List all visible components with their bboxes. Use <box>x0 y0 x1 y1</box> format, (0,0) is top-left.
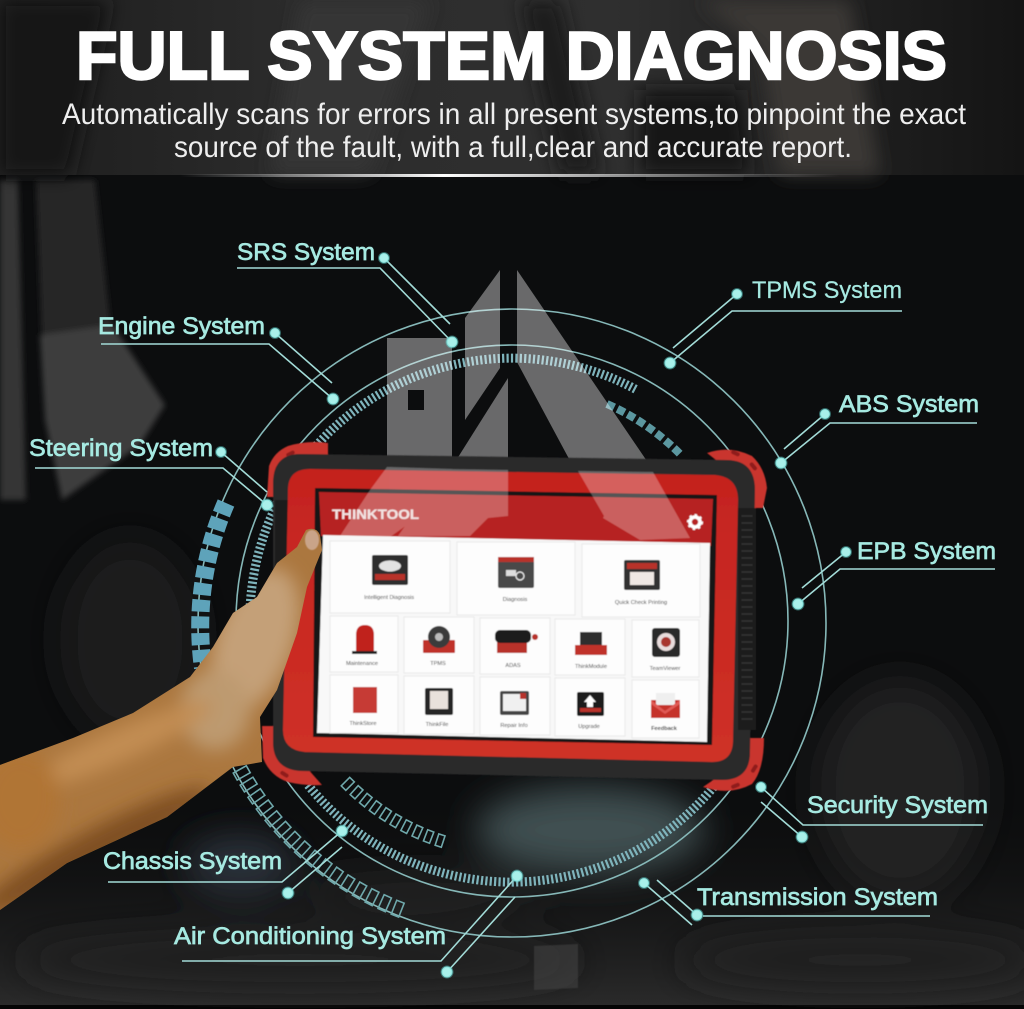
app: ThinkFile <box>425 688 453 728</box>
tick arc: top <box>250 358 637 610</box>
screen <box>317 535 710 742</box>
bumper: top right <box>707 449 767 508</box>
tablet <box>262 442 767 791</box>
app: Upgrade: Upgrade <box>578 724 600 730</box>
callout: Engine System <box>98 313 338 404</box>
callout: Security System: Security System <box>807 792 988 819</box>
callout: ABS System: ABS System <box>839 391 979 418</box>
callout: Steering System: Steering System <box>29 435 213 462</box>
callout: Transmission System <box>639 878 938 925</box>
title: FULL SYSTEM DIAGNOSIS <box>76 18 947 94</box>
header band <box>0 0 1024 177</box>
watermark on tablet <box>340 467 690 540</box>
callout: TPMS System <box>664 277 902 368</box>
app: Quick Check Printing <box>615 560 667 606</box>
HUD rings <box>198 309 826 937</box>
app: Repair Info <box>500 691 529 729</box>
thick dashes: top right <box>607 404 682 456</box>
app: ADAS <box>495 630 538 669</box>
callout: Security System <box>756 782 988 842</box>
app: Maintenance: Maintenance <box>346 661 378 667</box>
subtitle: Automatically scans for errors in all present systems,to pinpoint the exact <box>62 98 966 131</box>
header strip <box>319 492 713 546</box>
app cards <box>330 541 700 738</box>
callout: Air Conditioning System <box>174 870 522 978</box>
app: ThinkFile: ThinkFile <box>426 722 448 728</box>
subtitle <box>62 98 966 164</box>
bumper: top left <box>267 442 328 497</box>
app: TPMS <box>423 626 455 667</box>
callout: EPB System <box>792 538 996 610</box>
app: Feedback <box>651 693 680 732</box>
app: Quick Check Printing: Quick Check Printing <box>615 600 667 606</box>
app: TeamViewer: TeamViewer <box>650 666 680 672</box>
right grip <box>738 508 756 730</box>
watermark upper shapes <box>387 270 653 470</box>
callout: Chassis System: Chassis System <box>103 848 282 875</box>
bumper: bottom right <box>703 738 764 791</box>
callout: TPMS System: TPMS System <box>752 277 902 304</box>
left grip <box>275 500 289 610</box>
callout: Engine System: Engine System <box>98 313 265 340</box>
app: ADAS: ADAS <box>505 663 521 669</box>
hand holding tablet <box>0 520 330 929</box>
callout: ABS System <box>776 391 979 468</box>
app: Maintenance <box>346 625 378 667</box>
app: Diagnosis <box>498 557 534 603</box>
red frame <box>283 469 738 762</box>
app: ThinkStore: ThinkStore <box>349 721 377 727</box>
callout: Transmission System: Transmission System <box>697 884 938 911</box>
app: Upgrade <box>577 692 604 730</box>
app: Intelligent Diagnosis: Intelligent Diagnosis <box>364 595 414 601</box>
app: Diagnosis: Diagnosis <box>503 597 527 603</box>
callout: Steering System <box>29 435 272 510</box>
bumper: bottom left <box>262 726 322 785</box>
tablet body <box>273 454 755 780</box>
app: ThinkModule <box>575 632 607 670</box>
callout: Chassis System <box>103 826 348 898</box>
display bezel <box>313 488 717 745</box>
app: TPMS: TPMS <box>430 661 446 667</box>
icon: settings gear <box>688 515 702 529</box>
thick dashes: left <box>200 503 226 668</box>
subtitle: source of the fault, with a full,clear and accurate report. <box>174 131 852 164</box>
callout: Air Conditioning System: Air Conditioning System <box>174 923 446 950</box>
app: Intelligent Diagnosis <box>364 555 414 601</box>
app: Feedback: Feedback <box>651 726 678 732</box>
callout: SRS System: SRS System <box>237 239 375 266</box>
callout: SRS System <box>237 239 458 348</box>
app: Repair Info: Repair Info <box>500 723 528 729</box>
tick arc: bottom <box>308 784 716 882</box>
app: ThinkStore <box>349 687 377 727</box>
callout: EPB System: EPB System <box>857 538 996 565</box>
app: TeamViewer <box>650 628 680 672</box>
outlined box rings <box>233 766 445 917</box>
brand: THINKTOOL <box>332 506 419 522</box>
app: ThinkModule: ThinkModule <box>575 664 607 670</box>
